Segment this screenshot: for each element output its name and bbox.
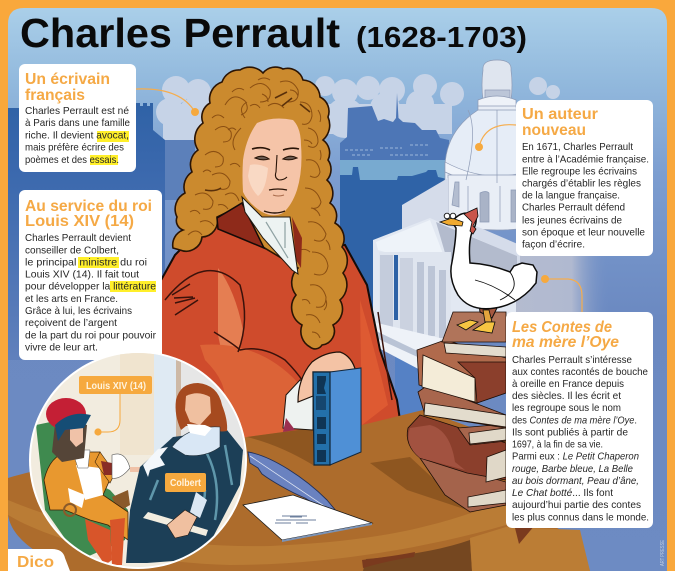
panel: Au service du roi Louis XIV: et les arts en France. [25,294,118,305]
panel: Au service du roi Louis XIV: Au service du roi [25,198,152,215]
panel: Un auteur nouveau [516,100,653,256]
panel: Au service du roi Louis XIV: le principal ministre du roi [25,258,147,268]
panel: Les Contes de ma mère l'Oye: aujourd’hui partie des contes [512,500,641,511]
Louis XIV name tag with pointer [79,376,152,436]
panel: Un écrivain français: Charles Perrault est né [25,106,129,117]
panel: Les Contes de ma mère l'Oye: les regroupe sous le nom [512,403,621,414]
panel: Un écrivain français: riche. Il devient avocat, [25,130,129,142]
panel: Les Contes de ma mère l'Oye: des Contes de ma mère l’Oye. [512,416,637,426]
panel: Les Contes de ma mère l'Oye: à oreille en France depuis [512,379,624,390]
panel: Un écrivain français: français [25,87,85,104]
panel: Les Contes de ma mère l'Oye: au bois dormant, Peau d’âne, [512,476,639,487]
collar and cravat [217,197,302,274]
Académie française dome [445,60,549,230]
panel: Les Contes de ma mère l'Oye: ma mère l’Oye [512,334,619,351]
table [8,410,590,571]
panel: Les Contes de ma mère l'Oye: Les Contes de [512,319,612,336]
quill pen [248,452,342,518]
panel: Un auteur nouveau: son époque et leur nouvelle [522,228,645,238]
man's coat [140,205,400,445]
panel: Les Contes de ma mère l'Oye: les plus connus dans le monde. [512,512,649,524]
man's face [242,119,302,215]
panel: Les Contes de ma mère l'Oye: Ils sont publiés à partir de [512,428,628,438]
background: left city silhouette [8,103,195,360]
panel: Les Contes de ma mère l'Oye: aux contes racontés de bouche [512,367,648,378]
panel: Au service du roi Louis XIV [19,190,162,360]
blue book [313,368,361,465]
man's curly wig [173,67,347,349]
sheet of paper [243,495,372,542]
Louis XIV name tag with pointer: Louis XIV (14) [86,381,146,392]
panel: Au service du roi Louis XIV: Louis XIV (14). Il fait tout [25,270,139,280]
panel: Au service du roi Louis XIV: pour développer la littérature [25,282,156,292]
title: (1628-1703) [356,22,527,54]
circular inset: Louis XIV and Colbert [28,350,251,570]
panel: Un écrivain français: Un écrivain [25,71,110,88]
panel: Les Contes de ma mère l'Oye [506,312,653,528]
panel: Un auteur nouveau: Un auteur [522,106,598,123]
panel: Un auteur nouveau: nouveau [522,122,586,139]
title [20,10,527,56]
Colbert name tag: Colbert [170,478,202,489]
stack of books [407,312,506,512]
panel: Un écrivain français: à Paris dans une famille [25,118,130,129]
panel: Un auteur nouveau: Charles Perrault défend [522,202,625,214]
panel: Un auteur nouveau: façon d’écrire. [522,240,585,250]
panel: Un auteur nouveau: En 1671, Charles Perrault [522,142,633,153]
Colbert [126,383,243,563]
panel: Un auteur nouveau: entre à l’Académie française. [522,154,649,166]
panel: Un auteur nouveau: Elle regroupe les écrivains [522,166,637,178]
Louis XIV's chair [36,420,130,560]
rolled shirt cuff and hand [283,352,356,432]
panel: Au service du roi Louis XIV: de la part du roi pour pouvoir [25,330,157,342]
panel: Au service du roi Louis XIV: reçoivent de l’argent [25,318,117,329]
panel: Les Contes de ma mère l'Oye: 1697, à la fin de sa vie. [512,440,603,450]
Louis XIV [44,398,140,565]
panel: Un écrivain français: mais préfère écrire des [25,142,124,154]
panel: Les Contes de ma mère l'Oye: des siècles. Il les écrit et [512,391,621,402]
press credit: ART PRESSE [660,540,666,566]
panel: Un écrivain français: poèmes et des essais. [25,155,119,166]
panel: Au service du roi Louis XIV: vivre de leur art. [25,342,98,354]
panel: Un auteur nouveau: chargés d’établir les règles [522,178,641,190]
panel: Les Contes de ma mère l'Oye: Charles Perrault s’intéresse [512,355,632,366]
panel: Au service du roi Louis XIV: Grâce à lui, les écrivains [25,306,132,317]
panel: Au service du roi Louis XIV: conseiller de Colbert, [25,246,119,256]
background: clouds [156,74,560,146]
panel: Un auteur nouveau: les jeunes écrivains de [522,216,622,226]
Colbert name tag [165,473,206,492]
panel: Un écrivain français [19,64,136,172]
panel: Au service du roi Louis XIV: Charles Perrault devient [25,233,131,244]
panel: Un auteur nouveau: de la langue française. [522,190,620,202]
Académie française portico [373,178,520,372]
panel: Les Contes de ma mère l'Oye: Le Chat botté... Ils font [512,488,613,499]
connector lines [136,89,582,312]
panel: Au service du roi Louis XIV: Louis XIV (14) [25,213,134,230]
connector dots [191,108,549,283]
background: right city, river and bank [340,93,452,420]
Dico tab: Dico [17,554,54,571]
Dico tab [8,549,70,571]
panel: Les Contes de ma mère l'Oye: rouge, Barbe bleue, La Belle [512,464,633,475]
goose on the books [440,208,537,333]
title: Charles Perrault [20,10,340,56]
panel: Les Contes de ma mère l'Oye: Parmi eux : Le Petit Chaperon [512,452,639,462]
background: fade under the auteur box [500,250,610,320]
